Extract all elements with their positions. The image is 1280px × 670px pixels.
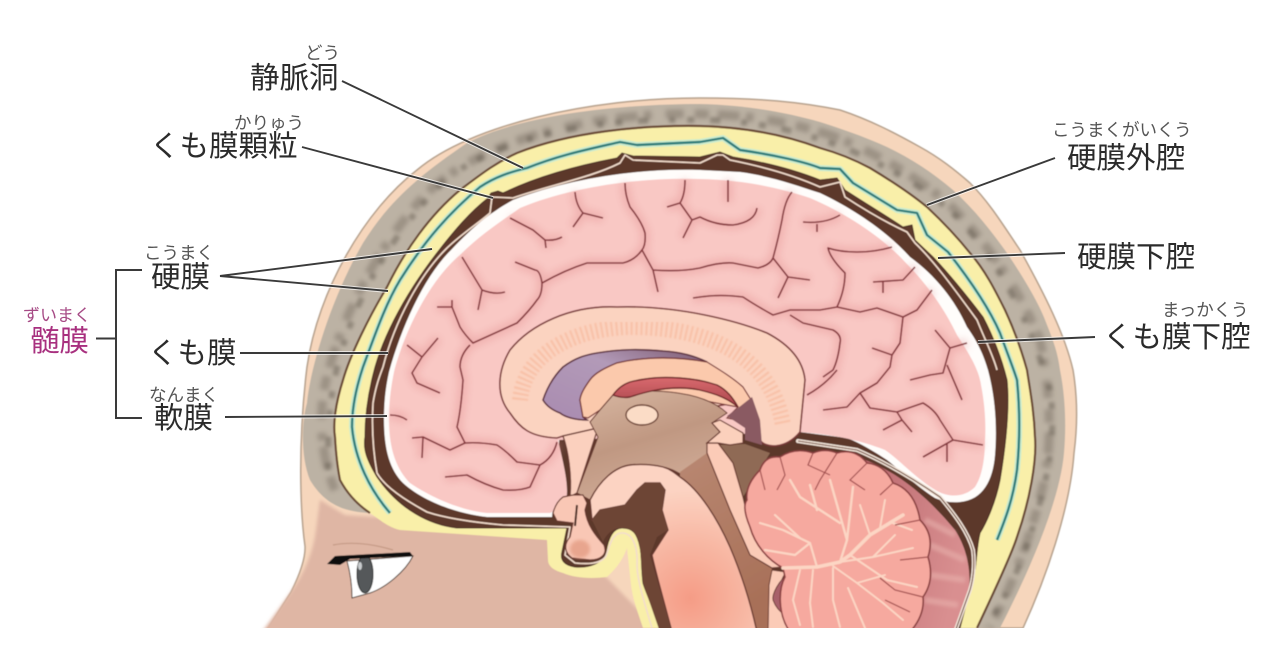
oval interthalamic adhesion [626, 405, 658, 425]
skin [268, 98, 1076, 628]
label: 硬膜外腔: 硬膜外腔 [1067, 142, 1185, 175]
label: 軟膜: なんまく [149, 385, 219, 405]
label: 硬膜 [144, 243, 214, 294]
red band [613, 377, 738, 407]
label: 静脈洞: 静脈洞 [250, 62, 339, 95]
cerebellum fissures [760, 453, 928, 612]
label: くも膜顆粒 [150, 113, 304, 163]
label: くも膜顆粒: くも膜顆粒 [150, 130, 298, 163]
yellow epidural fat layer [334, 126, 1035, 628]
label: 静脈洞: どう [305, 43, 340, 63]
lateral ventricle purple [543, 350, 707, 420]
fornix peach [580, 358, 753, 420]
thalamus brown area [577, 391, 730, 510]
label: 硬膜下腔: 硬膜下腔 [1077, 241, 1195, 274]
label: くも膜下腔: くも膜下腔 [1103, 321, 1251, 354]
cingulate arch [500, 307, 805, 446]
mauve region behind cerebellum [860, 458, 969, 632]
sphenoid dark cavity [592, 483, 672, 632]
pituitary and optic structures [553, 495, 605, 560]
label: 髄膜: 髄膜 [30, 325, 89, 358]
eye [327, 543, 413, 598]
label: くも膜顆粒: かりゅう [234, 113, 304, 133]
cerebrum [389, 179, 985, 513]
label: くも膜: くも膜 [148, 337, 237, 370]
mauve aqueduct area [727, 397, 762, 445]
lower peach band [767, 570, 788, 628]
label: 軟膜: 軟膜 [154, 402, 213, 435]
label: 硬膜外腔 [1052, 120, 1192, 175]
mauve lens [772, 579, 784, 613]
face tissue [262, 500, 660, 632]
bone inner edge line [334, 126, 1035, 628]
label: くも膜下腔 [1103, 300, 1251, 354]
label: 硬膜: こうまく [144, 243, 214, 263]
label: 髄膜 [23, 306, 91, 358]
leader lines [220, 81, 1095, 417]
dura light inner line [372, 155, 997, 628]
peach band to cerebellum [707, 443, 783, 568]
peach tissue beside brainstem [563, 428, 598, 497]
brown band behind brainstem [680, 453, 772, 632]
olive brown cavity [718, 444, 770, 497]
label: 軟膜 [149, 385, 219, 435]
dura mater dark band [364, 152, 1008, 628]
label: 静脈洞 [250, 43, 340, 95]
label: 硬膜: 硬膜 [151, 261, 210, 294]
brainstem pons [590, 464, 757, 632]
label: 髄膜: ずいまく [23, 306, 91, 325]
subarachnoid white band [384, 170, 996, 517]
bracket [96, 270, 142, 418]
label: 硬膜外腔: こうまくがいくう [1052, 120, 1192, 140]
cerebellum white matter tree [760, 480, 917, 628]
tectum lobule [707, 420, 743, 445]
tentorium double line [798, 441, 974, 632]
skull bone [303, 104, 1065, 628]
cerebellum [745, 450, 931, 632]
illustration: sagittal section of head and brain [262, 98, 1076, 632]
label: くも膜下腔: まっかくう [1162, 300, 1248, 320]
teal vessel line [352, 138, 1019, 540]
